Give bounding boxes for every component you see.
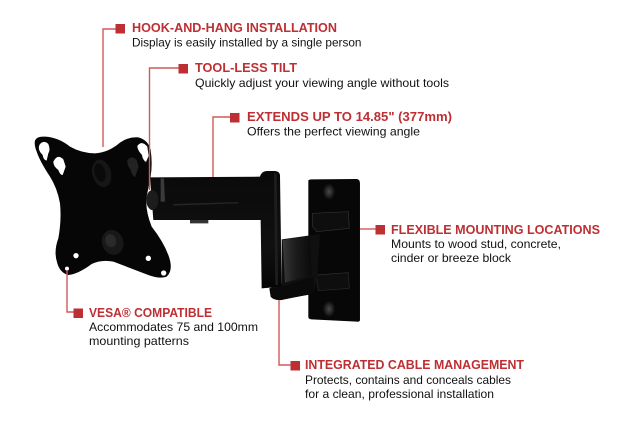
main extension arm [150, 171, 282, 288]
callout: integrated cable management: INTEGRATED CABLE MANAGEMENT [305, 358, 524, 372]
callout: hook-and-hang installation: Display is easily installed by a single person [132, 36, 362, 50]
callout: VESA compatible: Accommodates 75 and 100mm [89, 320, 258, 334]
callout: extends up to 14.85 inches [213, 110, 452, 177]
callout: VESA compatible: mounting patterns [89, 334, 189, 348]
callout: extends up to 14.85 inches: EXTENDS UP TO 14.85" (377mm) [247, 110, 452, 124]
callout: hook-and-hang installation [103, 21, 362, 147]
callout: integrated cable management: for a clean, professional installation [305, 387, 494, 401]
callout: tool-less tilt: Quickly adjust your viewing angle without tools [195, 76, 449, 90]
callout: hook-and-hang installation: HOOK-AND-HANG INSTALLATION [132, 21, 337, 35]
callout: flexible mounting locations [360, 223, 600, 265]
callout: tool-less tilt: TOOL-LESS TILT [195, 61, 297, 75]
mounting plate [35, 137, 171, 278]
product: wall mount arm [35, 137, 360, 322]
callout: integrated cable management: Protects, contains and conceals cables [305, 373, 511, 387]
callout: VESA compatible [67, 270, 258, 348]
callout: VESA compatible: VESA® COMPATIBLE [89, 306, 212, 320]
callout: extends up to 14.85 inches: Offers the perfect viewing angle [247, 124, 420, 138]
callout: integrated cable management [279, 300, 524, 401]
callout: tool-less tilt [150, 61, 449, 190]
lower link arm [269, 234, 320, 300]
callout: flexible mounting locations: FLEXIBLE MOUNTING LOCATIONS [391, 223, 600, 237]
callout: flexible mounting locations: Mounts to wood stud, concrete, [391, 237, 561, 251]
wall plate [308, 179, 360, 322]
callout: flexible mounting locations: cinder or breeze block [391, 251, 512, 265]
